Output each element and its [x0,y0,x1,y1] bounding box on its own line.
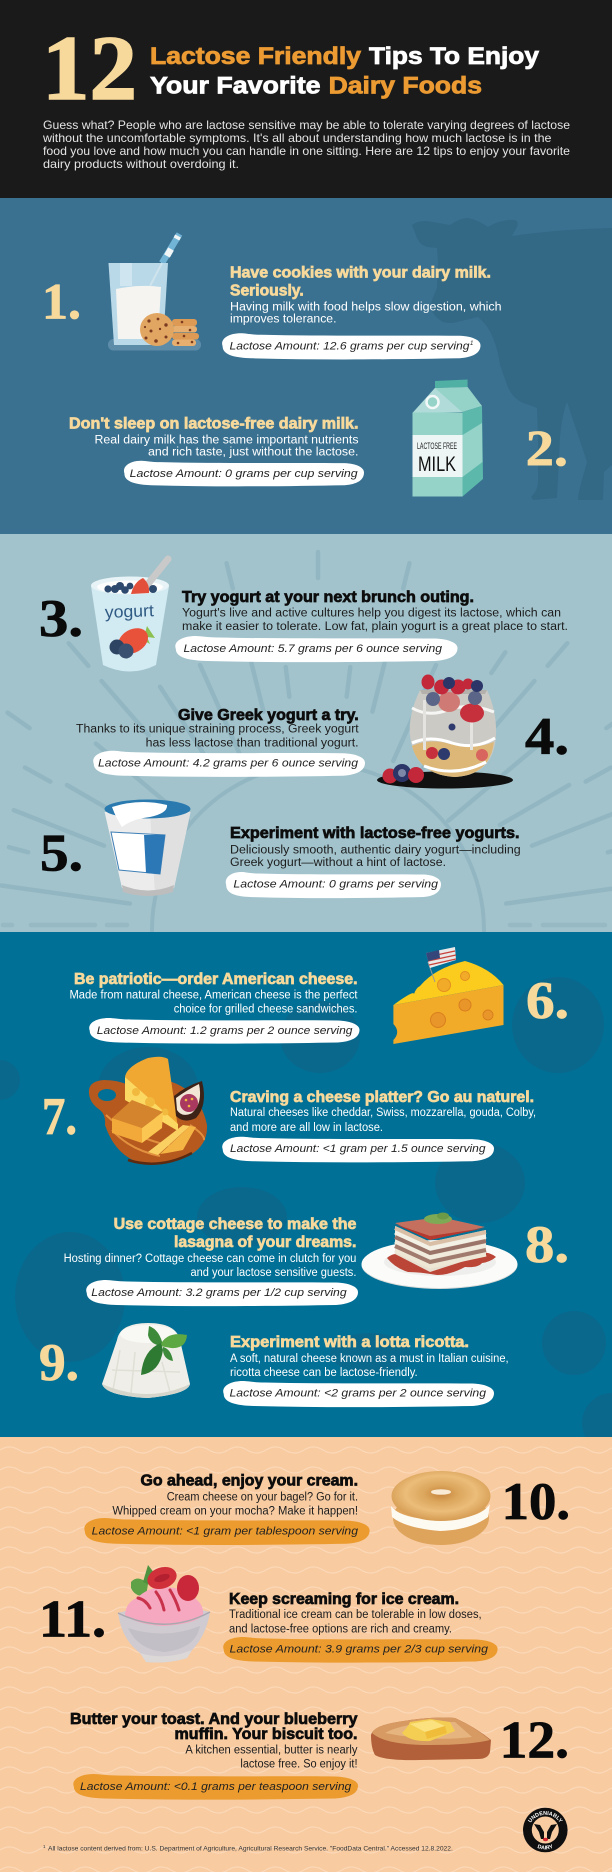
body 3 [182,608,568,633]
heading 10: Go ahead, enjoy your cream. [140,1473,358,1490]
body 11 [229,1609,482,1636]
callout: lactose amount 2 [124,461,364,486]
tip 10 [84,1471,570,1545]
tip 12 [70,1711,569,1800]
tip 6 [70,947,569,1044]
callout: lactose amount 3 [175,636,458,662]
body 7: and more are all low in lactose. [230,1122,383,1134]
body 6: choice for grilled cheese sandwiches. [174,1004,358,1016]
icon: lasagna on plate [362,1212,518,1289]
body 9: ricotta cheese can be lactose-friendly. [230,1367,418,1379]
callout: lactose amount 1 [222,333,480,359]
callout: lactose amount 11 [223,1637,498,1663]
callout: lactose amount 4: Lactose Amount: 4.2 grams per 6 ounce serving [98,758,359,770]
number 12: 12. [500,1712,569,1770]
callout: lactose amount 8 [86,1280,358,1306]
body 8: Hosting dinner? Cottage cheese can come in clutch for you [64,1253,356,1265]
body 1: Having milk with food helps slow digestion, which [230,302,502,314]
intro text: food you love and how much you can handle in one sitting. Here are 12 tips to enjoy your favorite [43,144,570,158]
icon: lactose-free yogurt tub [104,800,190,896]
panel: header [0,0,612,198]
title: Lactose Friendly [150,43,362,70]
tip 2 [69,380,568,496]
icon: greek yogurt parfait [377,674,513,788]
body 5: Greek yogurt—without a hint of lactose. [230,857,446,869]
footnote: All lactose content derived from: U.S. Department of Agriculture, Agricultural Research Service. "FoodData Central." Accessed 12.8.2022. [48,1846,453,1853]
body 8 [64,1253,356,1279]
icon: milk carton [412,380,483,496]
cow silhouette [412,218,612,500]
heading 7: Craving a cheese platter? Go au naturel. [230,1089,534,1106]
intro text: Guess what? People who are lactose sensitive may be able to tolerate varying degrees of lactose [43,118,570,132]
heading 5: Experiment with lactose-free yogurts. [230,825,520,842]
body 1 [230,302,502,326]
callout: lactose amount 10: Lactose Amount: <1 gram per tablespoon serving [92,1526,359,1538]
heading 1 [230,264,491,300]
callout: lactose amount 1: Lactose Amount: 12.6 grams per cup serving [230,340,470,352]
intro text: without the uncomfortable symptoms. It's all about understanding how much lactose is in the [42,131,552,145]
heading 8: lasagna of your dreams. [174,1234,356,1251]
body 3: Yogurt's live and active cultures help you digest its lactose, which can [182,608,561,620]
body 4: has less lactose than traditional yogurt. [146,738,359,750]
icon: ricotta with basil [102,1323,190,1398]
heading 8 [114,1216,357,1251]
body 3: make it easier to tolerate. Low fat, plain yogurt is a great place to start. [182,621,568,633]
icon: cheese platter [89,1057,207,1164]
body 12 [185,1745,358,1771]
icon: milk carton: MILK [418,453,456,476]
body 6 [70,990,358,1016]
body 10: Whipped cream on your mocha? Make it happen! [112,1506,358,1518]
tip 4 [76,674,569,788]
icon: ice cream sundae [118,1563,210,1662]
body 12: lactose free. So enjoy it! [240,1759,358,1771]
tip 7 [42,1057,536,1164]
callout: lactose amount 9: Lactose Amount: <2 grams per 2 ounce serving [230,1388,487,1400]
callout: lactose amount 12: Lactose Amount: <0.1 grams per teaspoon serving [80,1781,352,1793]
heading 3: Try yogurt at your next brunch outing. [182,589,474,606]
callout: lactose amount 12 [73,1774,358,1800]
body 6: Made from natural cheese, American cheese is the perfect [70,990,358,1002]
body 12: A kitchen essential, butter is nearly [185,1745,358,1757]
heading 2: Don't sleep on lactose-free dairy milk. [69,416,358,433]
number 8: 8. [525,1216,569,1274]
body 1: improves tolerance. [230,314,336,326]
callout: lactose amount 5: Lactose Amount: 0 grams per serving [233,879,439,891]
tip 1 [42,234,502,359]
callout: lactose amount 9 [223,1381,494,1407]
body 11: Traditional ice cream can be tolerable in low doses, [229,1609,482,1621]
body 2: and rich taste, just without the lactose. [148,447,358,459]
body 7 [230,1107,536,1134]
body 5: Deliciously smooth, authentic dairy yogurt—including [230,844,521,856]
number 1: 1. [42,274,81,330]
body 2: Real dairy milk has the same important nutrients [94,434,359,446]
callout: lactose amount 7: Lactose Amount: <1 gram per 1.5 ounce serving [230,1143,486,1155]
number 2: 2. [526,422,568,478]
callout: lactose amount 6: Lactose Amount: 1.2 grams per 2 ounce serving [97,1025,353,1037]
heading 12: muffin. Your biscuit too. [174,1726,358,1743]
big number 12: 12 [42,17,137,119]
panel: cream and butter tips [0,1437,612,1872]
icon: bagel with cream cheese [391,1471,490,1545]
body 9 [230,1353,509,1379]
callout: lactose amount 5 [226,872,441,898]
callout: lactose amount 7 [222,1137,494,1162]
body 11: and lactose-free options are rich and creamy. [229,1624,452,1636]
tip 8 [64,1212,569,1306]
tip 5 [40,800,521,898]
panel: milk tips [0,198,612,534]
number 7: 7. [42,1088,77,1146]
heading 9: Experiment with a lotta ricotta. [230,1334,469,1351]
panel: cheese tips [0,932,612,1453]
title: Tips To Enjoy [369,43,540,70]
callout: lactose amount 11: Lactose Amount: 3.9 grams per 2/3 cup serving [230,1644,489,1656]
icon: buttered toast [371,1718,491,1760]
logo: Undeniably Dairy: UNDENIABLY [528,1811,563,1822]
callout: lactose amount 4 [93,751,365,777]
body 4: Thanks to its unique straining process, Greek yogurt [76,724,360,736]
number 4: 4. [525,708,569,766]
intro text [42,118,570,171]
body 10: Cream cheese on your bagel? Go for it. [167,1492,358,1504]
heading 6: Be patriotic—order American cheese. [74,971,358,988]
number 11: 11. [39,1591,106,1649]
intro text: dairy products without overdoing it. [43,157,239,171]
heading 11: Keep screaming for ice cream. [229,1591,459,1608]
tip 3 [39,559,568,672]
callout: lactose amount 6 [89,1018,360,1044]
icon: milk glass and cookies [108,234,201,350]
number 6: 6. [526,972,569,1030]
body 10 [112,1492,358,1518]
number 5: 5. [40,825,83,883]
heading 12 [70,1711,358,1743]
icon: cheese wedge with flag [393,947,504,1044]
body 9: A soft, natural cheese known as a must in Italian cuisine, [230,1353,509,1365]
heading 8: Use cottage cheese to make the [114,1216,357,1233]
title: Your Favorite [150,72,320,100]
heading 1: Seriously. [230,282,304,300]
title [150,43,540,100]
logo: Undeniably Dairy [523,1808,568,1852]
heading 12: Butter your toast. And your blueberry [70,1711,358,1728]
body 4 [76,724,360,750]
callout: lactose amount 2: Lactose Amount: 0 grams per cup serving [130,468,359,480]
heading 1: Have cookies with your dairy milk. [230,264,491,282]
callout: lactose amount 3: Lactose Amount: 5.7 grams per 6 ounce serving [184,643,443,655]
body 8: and your lactose sensitive guests. [190,1267,356,1279]
number 10: 10. [502,1473,570,1531]
footnote: 1 [43,1844,46,1849]
title: Dairy Foods [329,72,482,100]
icon: yogurt cup [91,559,169,672]
yogurt cup label: yogurt [104,601,154,622]
callout: lactose amount 8: Lactose Amount: 3.2 grams per 1/2 cup serving [91,1287,348,1299]
tip 11 [39,1563,498,1663]
logo: Undeniably Dairy: DAIRY [538,1844,552,1850]
callout: lactose amount 10 [84,1518,370,1545]
heading 4: Give Greek yogurt a try. [178,707,359,724]
panel: yogurt tips [0,534,612,932]
body 2 [94,434,359,459]
number 9: 9. [39,1334,79,1392]
tip 9 [39,1323,509,1407]
body 5 [230,844,521,869]
number 3: 3. [39,590,83,648]
body 7: Natural cheeses like cheddar, Swiss, mozzarella, gouda, Colby, [230,1107,536,1119]
callout: lactose amount 1: 1 [470,341,473,347]
carton label: LACTOSE FREE [417,441,457,451]
